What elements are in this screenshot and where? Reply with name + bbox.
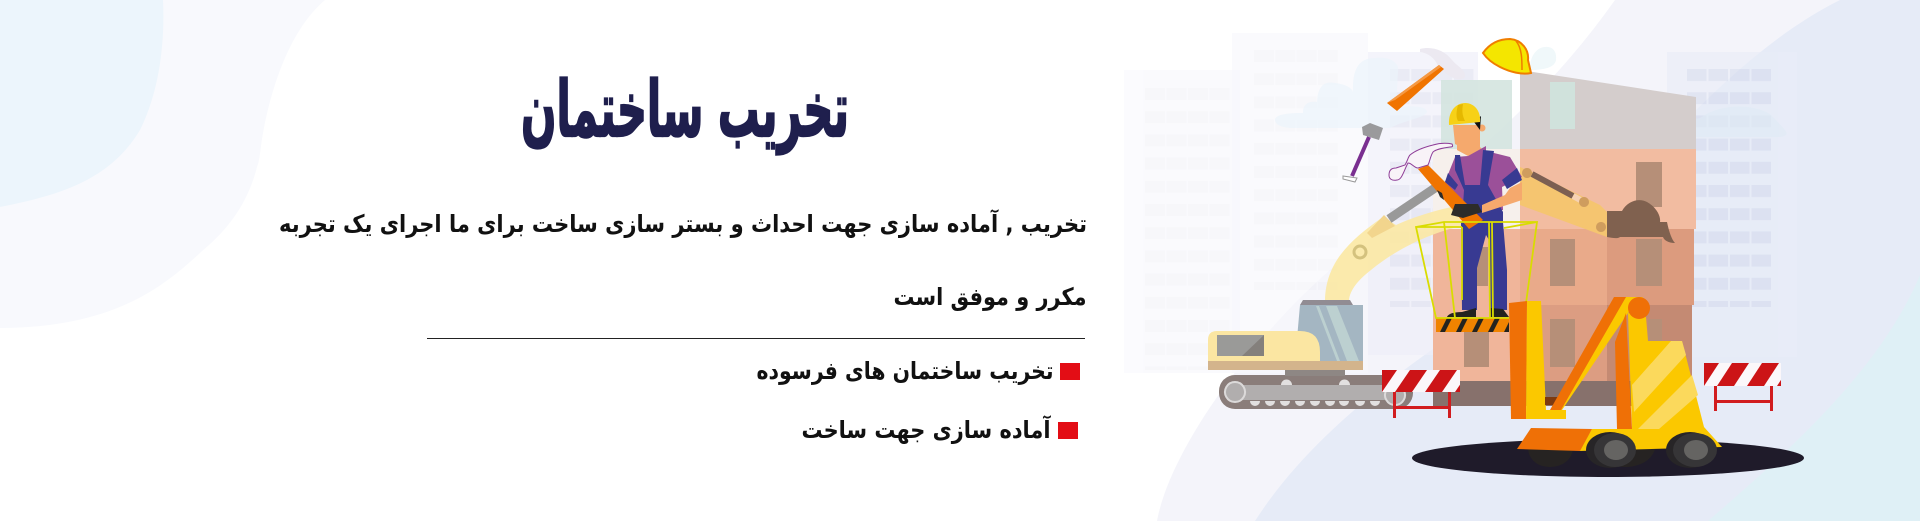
bullet text: تخریب ساختمان های فرسوده [756, 357, 1054, 385]
lift: diagonal arm yellow [1556, 297, 1643, 410]
building: windows [1464, 162, 1662, 367]
lift: pivot [1545, 397, 1560, 405]
cloud: left [1275, 58, 1427, 128]
excavator: boom joints [1522, 168, 1606, 232]
cloud: right [1627, 107, 1787, 137]
building: third tower [1368, 52, 1478, 355]
cloud: top [1530, 47, 1556, 70]
hammer handle highlight [1387, 65, 1441, 103]
lift: body light stripes [1632, 341, 1698, 429]
building: far left tower [1124, 70, 1240, 373]
excavator: track band [1228, 385, 1400, 400]
building: teal upper-left block [1441, 80, 1512, 149]
worker: forearm [1482, 182, 1522, 213]
worker: hair [1474, 116, 1481, 130]
excavator: boom [1520, 167, 1607, 237]
lift: joint [1628, 297, 1650, 319]
lift: mast orange [1509, 301, 1527, 419]
bullet marker red square [1060, 363, 1080, 380]
excavator: vent shade [1242, 335, 1264, 356]
building: second tower [1232, 33, 1368, 373]
lift: front wheel [1586, 432, 1636, 468]
excavator: cab glass stripes [1316, 306, 1359, 361]
mallet end [1343, 176, 1357, 182]
building: third storey right [1520, 229, 1694, 305]
excavator: track wheels [1250, 380, 1380, 406]
bullet text: آماده سازی جهت ساخت [802, 415, 1051, 444]
icon: flying mallet [1343, 123, 1383, 182]
body text line 2: مکرر و موفق است [894, 283, 1086, 311]
icon: flying safety helmet [1483, 39, 1531, 74]
background: bottom-right cyan wave [1708, 275, 1920, 521]
excavator: arm joint [1354, 246, 1366, 258]
excavator: body [1208, 331, 1320, 361]
worker: shoes [1447, 308, 1509, 317]
hammer handle [1387, 65, 1444, 111]
excavator: track [1219, 375, 1413, 409]
excavator: arm [1325, 203, 1482, 300]
excavator: cab roof [1300, 300, 1353, 305]
title: تخریب ساختمان [521, 66, 849, 155]
background: right lilac wave [1157, 0, 1920, 521]
lift: body orange side [1615, 313, 1632, 429]
background: top-left blue blob [0, 0, 163, 207]
lift: front bucket [1517, 428, 1592, 451]
building: grey top storey [1520, 70, 1696, 149]
road barrier right [1704, 363, 1781, 411]
background: top-left pale blob [0, 0, 325, 328]
divider [427, 338, 1085, 339]
lift: body yellow [1579, 313, 1722, 451]
lift basket wire frame [1416, 222, 1537, 318]
lift: mast yellow [1526, 301, 1566, 419]
hammer head [1420, 48, 1465, 79]
worker: ear [1478, 124, 1486, 132]
worker [1389, 103, 1522, 317]
background: right blue wave [1255, 0, 1920, 521]
bullet marker red square [1058, 422, 1078, 439]
worker: left sleeve [1445, 173, 1458, 190]
worker: neck and face [1453, 125, 1483, 156]
body text line 1: تخریب , آماده سازی جهت احداث و بستر سازی ساخت برای ما اجرای یک تجربه [279, 209, 1087, 238]
building: foundation [1433, 381, 1692, 406]
building: lower storey [1520, 305, 1692, 381]
building: third storey shade [1607, 229, 1694, 305]
main damaged building [1433, 70, 1696, 406]
excavator: bucket [1607, 200, 1675, 243]
lift machine [1509, 297, 1722, 468]
road barrier left [1382, 370, 1460, 418]
ground shadow [1412, 439, 1804, 477]
mallet head [1362, 123, 1383, 140]
wheel shadows [1528, 449, 1655, 467]
worker: shirt [1445, 146, 1522, 210]
worker: hard hat [1449, 103, 1480, 125]
worker: hammer head outline [1389, 143, 1453, 180]
worker: gloves [1437, 190, 1482, 218]
building: pale left wall [1433, 149, 1520, 229]
lift basket platform [1436, 318, 1509, 332]
building: second storey [1520, 149, 1696, 229]
excavator: arm elbow [1367, 215, 1395, 238]
excavator: drive rings [1225, 382, 1405, 405]
excavator: piston [1389, 188, 1435, 219]
excavator: base [1208, 361, 1363, 370]
excavator: vent [1217, 335, 1264, 356]
building: right tower [1667, 52, 1797, 357]
excavator: hydraulic rod end [1573, 196, 1584, 202]
icon: flying hammer [1387, 48, 1465, 111]
worker: overall bib and straps [1455, 150, 1503, 222]
excavator: hydraulic rod [1532, 174, 1573, 196]
worker: right sleeve [1502, 168, 1522, 189]
building: third storey left [1433, 229, 1520, 381]
worker: legs [1461, 222, 1507, 310]
bullet 2 [802, 415, 1078, 444]
mallet handle [1352, 137, 1369, 176]
lift: diagonal arm orange [1550, 297, 1626, 410]
lift: rear wheel [1666, 432, 1717, 468]
excavator [1208, 167, 1675, 409]
worker: hat stripe [1456, 104, 1465, 121]
worker: hammer handle [1418, 165, 1483, 229]
building: teal window [1550, 82, 1575, 129]
building: lower storey shade [1607, 305, 1692, 381]
excavator: turret neck [1285, 370, 1345, 376]
excavator: cab [1295, 305, 1363, 361]
bullet 1 [756, 357, 1080, 385]
